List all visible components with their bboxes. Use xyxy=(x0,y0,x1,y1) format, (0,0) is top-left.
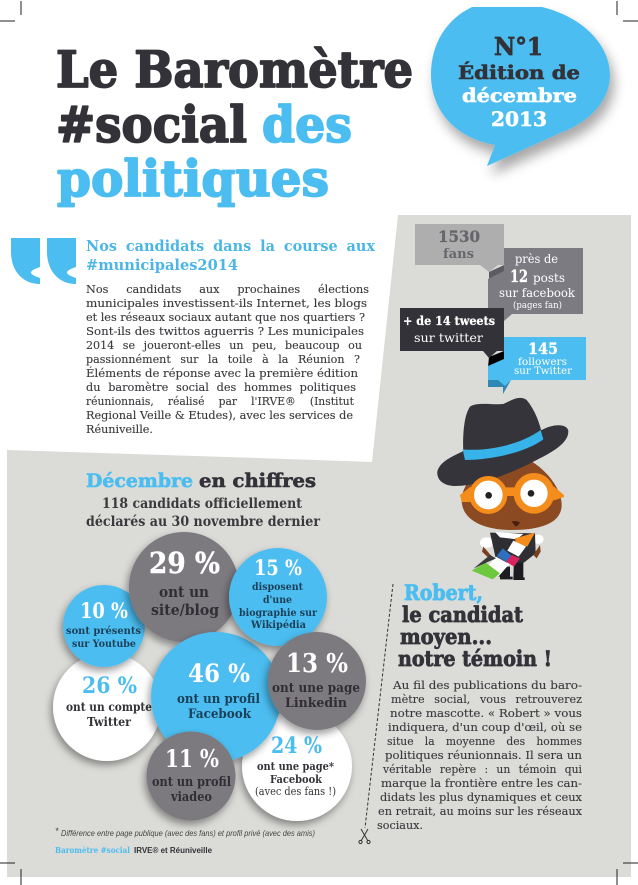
intro text block: Sont-ils des twittos aguerris ? Les municipales xyxy=(86,325,364,338)
subheading: candidates count: déclarés au 30 novembre dernier xyxy=(86,514,321,530)
Robert text block xyxy=(377,679,583,832)
Robert text block: politiques réunionnais. Il sera un xyxy=(385,749,582,762)
box: 12 posts facebook xyxy=(488,248,583,321)
source credit: Baromètre #social xyxy=(55,845,130,855)
box: 145 followers xyxy=(488,337,586,394)
subheading: candidates count: 118 candidats officiellement xyxy=(102,496,303,512)
title: Le Baromètre xyxy=(56,40,413,99)
bubble: 26% Twitter: 26 % xyxy=(82,673,137,699)
intro text block: réunionnais, réalisé par l'IRVE® (Institut xyxy=(86,395,355,408)
box: 145 followers: followers xyxy=(518,357,567,368)
heading: Décembre en chiffres xyxy=(86,470,316,492)
heading: Décembre en chiffres: Décembre xyxy=(86,470,193,492)
box: 1530 fans xyxy=(415,224,504,272)
bubble: 11% viadeo: 11 % xyxy=(165,744,219,773)
intro text block: Réuniveille. xyxy=(86,423,153,436)
heading: Décembre en chiffres: en chiffres xyxy=(199,470,316,492)
intro text block: 2014 se joueront-elles un peu, beaucoup ou xyxy=(86,339,362,352)
intro text block: municipales investissent-ils Internet, les blogs xyxy=(86,297,367,310)
Robert text block: Au fil des publications du baro- xyxy=(392,679,582,692)
bubble: 11% viadeo xyxy=(146,732,236,820)
bubble: 15% Wikipedia: disposent xyxy=(252,581,303,593)
icon: quotation marks xyxy=(11,238,76,284)
title: des xyxy=(262,95,352,154)
intro text block xyxy=(86,283,369,436)
box: 12 posts facebook: 12 xyxy=(510,267,528,287)
heading: Robert: Robert, xyxy=(404,580,483,605)
icon: Robert the mascot xyxy=(437,398,568,580)
Robert text block: situe la moyenne des hommes xyxy=(387,735,582,748)
box: 1530 fans: fans xyxy=(443,247,474,262)
dashed cut line xyxy=(365,584,393,828)
bubble: 26% Twitter: Twitter xyxy=(87,715,132,729)
title xyxy=(56,40,413,208)
bubble: 24% Facebook page: 24 % xyxy=(271,733,322,759)
box: 12 posts facebook: posts xyxy=(533,270,565,285)
panel: grey background xyxy=(7,215,631,877)
source credit xyxy=(55,845,213,855)
bubble: 11% viadeo: ont un profil xyxy=(152,775,231,790)
Robert text block: mètre social, vous retrouverez xyxy=(391,693,582,706)
box: 145 followers: sur Twitter xyxy=(514,366,572,377)
bubble: 13% Linkedin xyxy=(268,632,366,730)
bubble chart: percentages xyxy=(53,532,366,821)
intro text block: passionnément sur la toile à la Réunion ? xyxy=(86,353,360,366)
bubble: 29% site/blog: 29 % xyxy=(149,546,220,580)
box: 14 tweets: sur twitter xyxy=(414,330,483,345)
callout: edition bubble: 2013 xyxy=(491,107,547,131)
bubble: 24% Facebook page: Facebook xyxy=(270,772,323,786)
social stats speech boxes xyxy=(400,224,586,394)
bubble: 24% Facebook page xyxy=(242,711,352,821)
box: 12 posts facebook: (pages fan) xyxy=(513,300,562,311)
subheading: candidates count xyxy=(86,496,321,530)
bubble: 15% Wikipedia xyxy=(229,548,327,646)
intro text block: et les réseaux sociaux autant que nos quartiers ? xyxy=(86,311,365,324)
bubble: 26% Twitter xyxy=(53,653,161,761)
bubble: 10% Youtube: 10 % xyxy=(80,598,128,623)
heading: Robert: le candidat xyxy=(402,602,523,627)
callout: edition bubble xyxy=(431,7,610,166)
Robert text block: indiquera, d'un coup d'œil, où se xyxy=(388,721,582,734)
bubble: 46% Facebook profile xyxy=(151,632,281,762)
footnote: * xyxy=(55,826,59,836)
Robert text block: notre mascotte. « Robert » vous xyxy=(390,707,582,720)
intro heading: #municipales2014 xyxy=(86,256,238,274)
heading: Robert xyxy=(398,580,552,671)
bubble: 15% Wikipedia: Wikipédia xyxy=(250,619,306,631)
bubble: 29% site/blog: site/blog xyxy=(151,601,219,619)
callout: edition bubble: décembre xyxy=(462,85,577,107)
bubble: 10% Youtube: sur Youtube xyxy=(72,638,136,650)
box: 14 tweets: + de 14 tweets xyxy=(403,313,495,328)
box: 14 tweets xyxy=(400,308,504,367)
intro text block: Regional Veille & Etudes), avec les services de xyxy=(86,409,353,422)
Robert text block: marque la frontière entre les can- xyxy=(381,777,582,790)
icon: scissors xyxy=(359,829,370,844)
bubble: 15% Wikipedia: 15 % xyxy=(254,555,302,580)
bubble: 15% Wikipedia: biographie sur xyxy=(239,607,317,619)
bubble: 29% site/blog xyxy=(129,532,239,642)
Robert text block: en retrait, au moins sur les réseaux xyxy=(378,805,583,818)
bubble: 46% Facebook profile: Facebook xyxy=(188,707,252,722)
title: #social xyxy=(56,95,247,154)
bubble: 24% Facebook page: ont une page* xyxy=(257,759,334,773)
bubble: 15% Wikipedia: d'une xyxy=(263,594,292,606)
footnote: Différence entre page publique (avec des fans) et profil privé (avec des amis) xyxy=(61,828,315,838)
box: 12 posts facebook: près de xyxy=(515,252,558,266)
intro text block: Nos candidats aux prochaines élections xyxy=(86,283,369,296)
bubble: 13% Linkedin: ont une page xyxy=(272,681,360,696)
callout: edition bubble: N°1 xyxy=(494,32,543,61)
bubble: 13% Linkedin: 13 % xyxy=(286,649,348,679)
bubble: 29% site/blog: ont un xyxy=(159,583,209,601)
intro text block: du baromètre social des hommes politiques xyxy=(86,381,356,394)
Robert text block: sociaux. xyxy=(377,819,423,832)
bubble: 10% Youtube: sont présents xyxy=(66,625,141,637)
bubble: 11% viadeo: viadeo xyxy=(170,790,212,805)
bubble: 13% Linkedin: Linkedin xyxy=(285,696,348,711)
bubble: 26% Twitter: ont un compte xyxy=(66,700,152,714)
intro text block: Éléments de réponse avec la première édition xyxy=(86,366,358,380)
heading: Robert: moyen... xyxy=(400,624,492,649)
Robert text block: didats les plus dynamiques et ceux xyxy=(380,791,583,804)
bubble: 46% Facebook profile: 46 % xyxy=(188,659,250,688)
title: politiques xyxy=(57,149,329,208)
source credit: IRVE® et Réuniveille xyxy=(134,846,213,855)
bubble: 46% Facebook profile: ont un profil xyxy=(177,692,260,707)
box: 1530 fans: 1530 xyxy=(438,227,480,246)
bubble: 10% Youtube xyxy=(63,585,145,667)
heading: Robert: notre témoin ! xyxy=(398,646,552,671)
intro heading: Nos candidats dans la course aux xyxy=(86,237,376,255)
intro heading xyxy=(86,237,376,274)
Robert text block: véritable repère : un témoin qui xyxy=(382,763,582,776)
bubble: 24% Facebook page: (avec des fans !) xyxy=(255,785,336,798)
callout: edition bubble: Édition de xyxy=(458,61,580,84)
box: 145 followers: 145 xyxy=(528,339,558,358)
box: 12 posts facebook: sur facebook xyxy=(499,286,576,300)
